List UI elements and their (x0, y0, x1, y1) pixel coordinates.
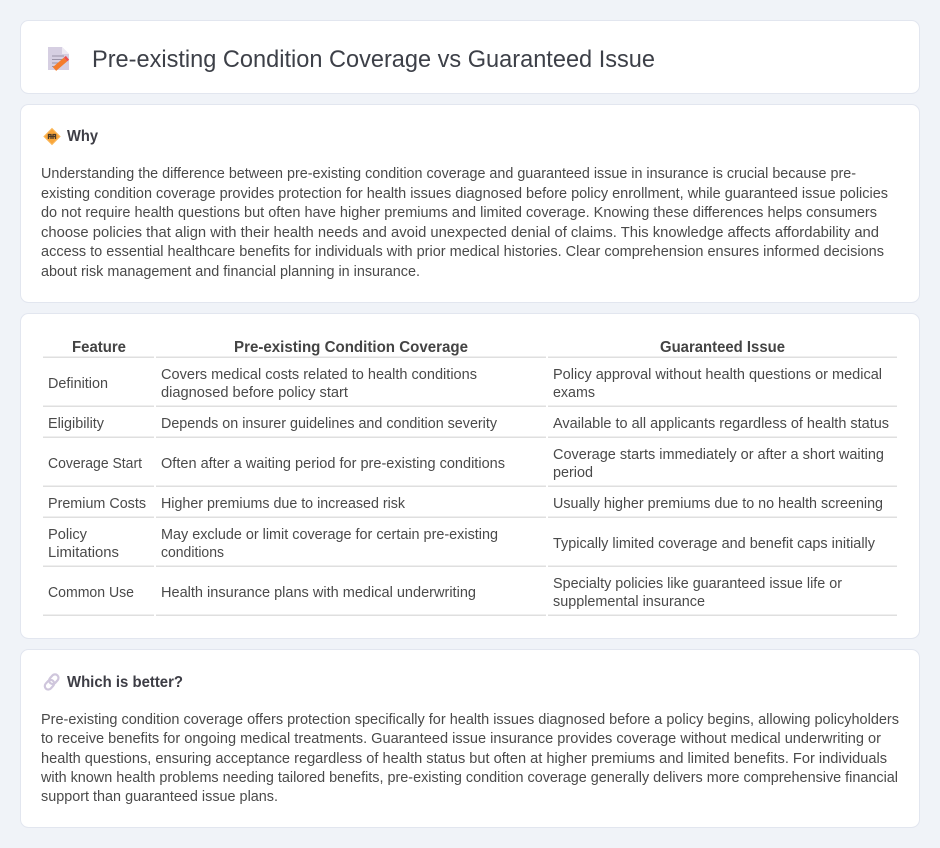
text block: why paragraph: do not require health questions but often have higher premiums and limited coverage. Knowing these differences helps consumers (41, 205, 877, 221)
icon: children crossing sign (44, 128, 60, 144)
text block: why paragraph: choose policies that align with their health needs and avoid unexpected denial of claims. This knowledge affects affordability and (41, 225, 879, 241)
heading: which is better: Which is better? (67, 674, 183, 691)
row: policy limitations: May exclude or limit coverage for certain pre-existing (161, 527, 498, 543)
row: coverage start: period (553, 465, 593, 481)
row: coverage start: Often after a waiting period for pre-existing conditions (161, 456, 505, 472)
text block: which is better paragraph: Pre-existing condition coverage offers protection specifically for health issues diagnosed before a policy begins, allowing policyholders (41, 712, 899, 728)
row: common use: supplemental insurance (553, 594, 705, 610)
row: eligibility: Depends on insurer guidelines and condition severity (161, 416, 498, 432)
row: definition: diagnosed before policy start (161, 385, 348, 401)
text block: why paragraph (41, 166, 888, 280)
text block: why paragraph: existing condition coverage provides protection for health issues diagnosed before policy enrollment, while guaranteed issue policies (41, 186, 888, 202)
text block: why paragraph: about risk management and financial planning in insurance. (41, 264, 420, 280)
row: common use: Common Use (48, 585, 134, 601)
row: eligibility: Available to all applicants regardless of health status (553, 416, 889, 432)
heading: why: Why (67, 128, 98, 145)
row: common use: Specialty policies like guaranteed issue life or (553, 576, 842, 592)
text block: which is better paragraph: with known health problems needing tailored benefits, pre-existing condition coverage generally delivers more comprehensive financial (40, 770, 898, 786)
text block: why paragraph: access to essential healthcare benefits for individuals with prior medical histories. Clear comprehension ensures informed decisions (41, 244, 884, 260)
table header: Guaranteed Issue (660, 339, 785, 356)
row: premium costs: Premium Costs (48, 496, 146, 512)
icon: chain link (43, 673, 60, 691)
table header: Pre-existing Condition Coverage (234, 339, 468, 356)
row: policy limitations: conditions (161, 545, 224, 561)
panel: which is better (20, 650, 920, 828)
row: premium costs: Usually higher premiums due to no health screening (553, 496, 883, 512)
row: eligibility (43, 416, 897, 438)
row: definition: Covers medical costs related to health conditions (161, 367, 477, 383)
panel: comparison table (20, 314, 920, 638)
table header (43, 339, 897, 358)
row: coverage start: Coverage Start (48, 456, 142, 472)
text block: which is better paragraph (40, 712, 899, 805)
row: common use: Health insurance plans with medical underwriting (161, 585, 476, 601)
row: premium costs: Higher premiums due to increased risk (161, 496, 406, 512)
row: policy limitations: Limitations (48, 545, 119, 561)
row: definition: Definition (48, 376, 108, 392)
text block: which is better paragraph: support than guaranteed issue plans. (41, 789, 278, 805)
text block: which is better paragraph: to receive benefits for ongoing medical treatments. Guaranteed issue insurance provides coverage without medical underwriting or (41, 731, 881, 747)
table header: Feature (72, 339, 126, 356)
icon: memo with pencil (48, 47, 69, 70)
row: definition (43, 367, 897, 407)
text block: why paragraph: Understanding the difference between pre-existing condition coverage and guaranteed issue in insurance is crucial because pre- (41, 166, 856, 182)
row: common use (43, 576, 897, 616)
title: Pre-existing Condition Coverage vs Guaranteed Issue (92, 46, 655, 73)
row: definition: exams (553, 385, 595, 401)
row: coverage start (43, 447, 897, 487)
row: policy limitations (43, 527, 897, 567)
row: definition: Policy approval without health questions or medical (553, 367, 882, 383)
row: coverage start: Coverage starts immediately or after a short waiting (553, 447, 884, 463)
row: policy limitations: Typically limited coverage and benefit caps initially (553, 536, 876, 552)
text block: which is better paragraph: health questions, ensuring acceptance regardless of health status but often at higher premiums and limited benefits. For individuals (41, 751, 887, 767)
panel: title header (20, 20, 920, 94)
row: eligibility: Eligibility (48, 416, 105, 432)
row: premium costs (43, 496, 897, 518)
row: policy limitations: Policy (48, 527, 88, 543)
panel: why (20, 104, 920, 302)
